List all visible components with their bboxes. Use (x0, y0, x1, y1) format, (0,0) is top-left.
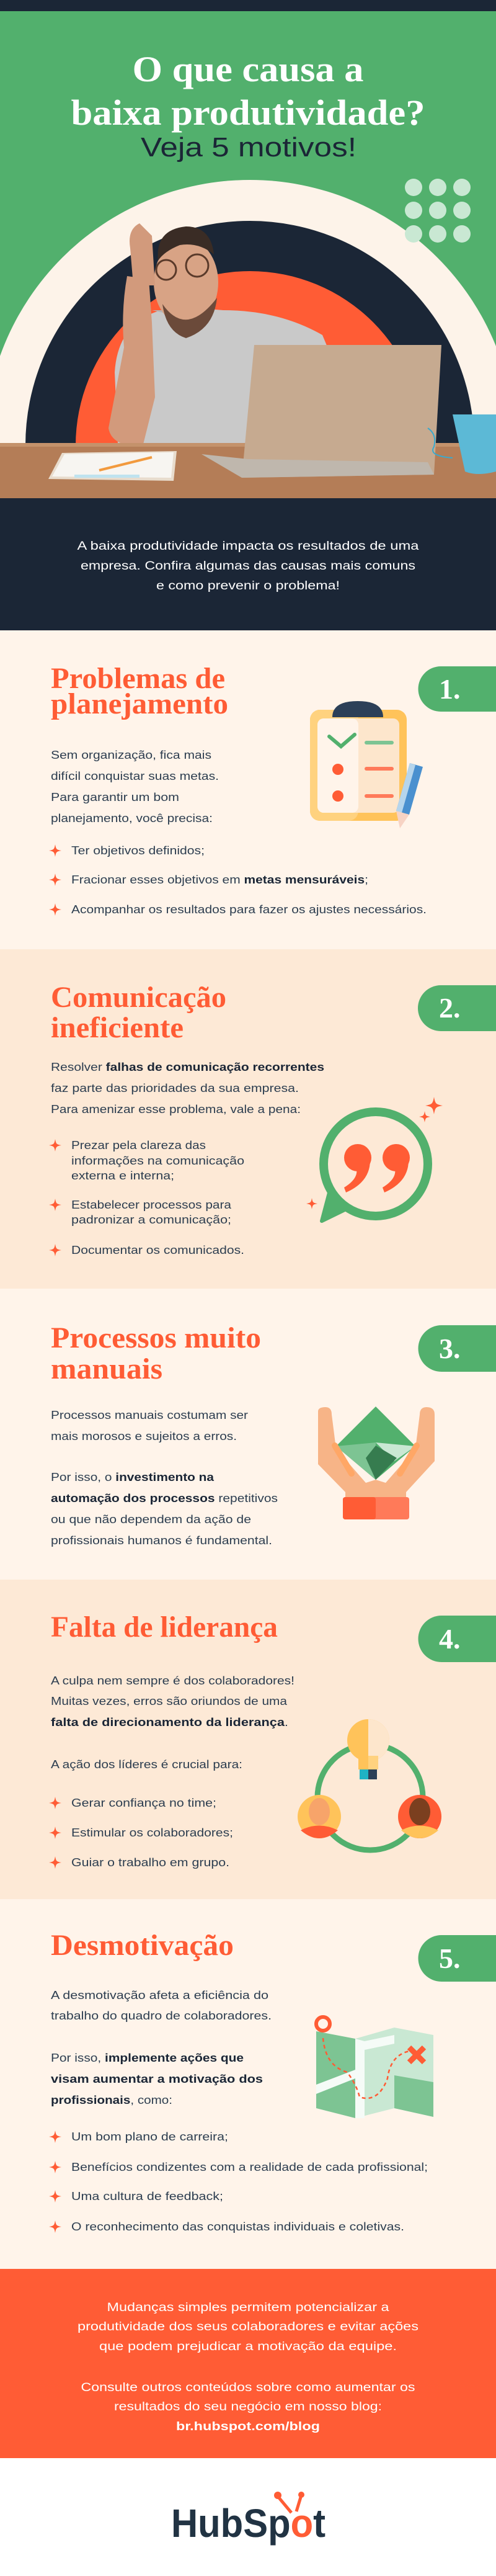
heading 2 (51, 981, 226, 1044)
bullet list 4: Gerar confiança no time; (71, 1797, 216, 1809)
badge 3: 3. (439, 1333, 460, 1364)
heading 2: Comunicação (51, 981, 226, 1014)
icon: leadership cycle (298, 1719, 441, 1850)
text block 5: trabalho do quadro de colaboradores. (51, 2010, 272, 2022)
text block 1: planejamento, você precisa: (51, 812, 213, 825)
callout: closing: br.hubspot.com/blog (176, 2420, 320, 2433)
intro panel: e como prevenir o problema! (156, 579, 340, 593)
bullet list 2: Estabelecer processos para (71, 1199, 232, 1211)
text block 5: Por isso, implemente ações que (51, 2052, 244, 2064)
bullet list 5 (49, 2131, 428, 2233)
text block 4: A culpa nem sempre é dos colaboradores! (51, 1675, 294, 1687)
heading 1 (51, 662, 228, 720)
badge 2 (418, 985, 496, 1031)
text block 4: A ação dos líderes é crucial para: (51, 1758, 242, 1771)
heading 5: Desmotivação (51, 1929, 234, 1962)
text block 5: profissionais , como: (51, 2094, 172, 2106)
notepad (48, 451, 177, 481)
callout: closing: produtividade dos seus colaboradores e evitar ações (78, 2320, 418, 2333)
heading 4: Falta de liderança (51, 1611, 278, 1644)
badge 3 (418, 1325, 496, 1372)
callout: closing: Consulte outros conteúdos sobre como aumentar os (81, 2381, 415, 2394)
text block 4: Muitas vezes, erros são oriundos de uma (51, 1695, 288, 1707)
heading 1: Problemas de (51, 662, 225, 695)
title: baixa produtividade? (71, 92, 425, 133)
desk (0, 443, 496, 498)
badge 1 (418, 666, 496, 712)
text block 2: Resolver falhas de comunicação recorrentes (51, 1061, 324, 1073)
text block 1: Sem organização, fica mais (51, 749, 211, 761)
top bar (0, 0, 496, 11)
bullet list 2: informações na comunicação (71, 1155, 244, 1167)
callout: closing: Mudanças simples permitem potencializar a (107, 2301, 389, 2314)
badge 4 (418, 1616, 496, 1662)
text block 5 (51, 1989, 272, 2106)
logo: HubSpot: HubSpot (171, 2501, 326, 2546)
decorative dots (405, 179, 471, 243)
text block 3: Processos manuais costumam ser (51, 1409, 248, 1421)
hero panel (0, 11, 496, 498)
text block 3: profissionais humanos é fundamental. (51, 1534, 272, 1547)
heading 1: planejamento (51, 687, 228, 720)
bullet list 2: Documentar os comunicados. (71, 1244, 244, 1256)
badge 2: 2. (439, 992, 460, 1024)
cup (428, 414, 496, 474)
bullet list 4: Guiar o trabalho em grupo. (71, 1856, 229, 1869)
text block 3: ou que não dependem da ação de (51, 1513, 251, 1526)
bullet list 4 (49, 1797, 233, 1869)
bullet list 1 (49, 844, 427, 916)
icon: clipboard (310, 701, 423, 828)
badge 5: 5. (439, 1943, 460, 1974)
intro panel: empresa. Confira algumas das causas mais comuns (81, 560, 415, 573)
text block 5: A desmotivação afeta a eficiência do (51, 1989, 268, 2001)
bullet list 5: Benefícios condizentes com a realidade de cada profissional; (71, 2161, 428, 2173)
heading 3: Processos muito (51, 1322, 261, 1354)
panel: 5 desmotivação (0, 1899, 496, 2269)
bullet list 5: O reconhecimento das conquistas individuais e coletivas. (71, 2220, 404, 2233)
photo: man at desk (108, 223, 338, 447)
bullet list 2: externa e interna; (71, 1169, 174, 1182)
callout: closing (0, 2269, 496, 2458)
bullet list 2: padronizar a comunicação; (71, 1214, 231, 1226)
badge 5 (418, 1935, 496, 1982)
intro panel (0, 498, 496, 630)
callout: closing: que podem prejudicar a motivação da equipe. (99, 2340, 397, 2353)
text block 4 (51, 1675, 294, 1771)
heading 3: manuais (51, 1353, 162, 1385)
bullet list 2: Prezar pela clareza das (71, 1139, 206, 1152)
text block 4: falta de direcionamento da liderança . (51, 1716, 288, 1729)
subtitle: Veja 5 motivos! (141, 132, 356, 163)
heading 2: ineficiente (51, 1011, 184, 1044)
text block 2 (51, 1061, 324, 1116)
bullet list 5: Um bom plano de carreira; (71, 2131, 228, 2143)
badge 4: 4. (439, 1623, 460, 1655)
title (71, 49, 425, 133)
text block 3 (51, 1409, 278, 1547)
bullet list 1: Fracionar esses objetivos em metas mensuráveis ; (71, 874, 368, 886)
text block 1: difícil conquistar suas metas. (51, 770, 219, 782)
bullet list 4: Estimular os colaboradores; (71, 1827, 233, 1839)
bullet list 2 (49, 1139, 244, 1256)
icon: hands with puzzle (318, 1407, 435, 1519)
laptop (202, 345, 441, 478)
text block 2: Para amenizar esse problema, vale a pena: (51, 1103, 301, 1116)
text block 1: Para garantir um bom (51, 791, 179, 803)
bullet list 5: Uma cultura de feedback; (71, 2190, 223, 2203)
footer (0, 2458, 496, 2576)
badge 1: 1. (439, 673, 460, 705)
text block 3: mais morosos e sujeitos a erros. (51, 1430, 237, 1442)
panel: 2 comunicação (0, 949, 496, 1289)
title: O que causa a (133, 49, 363, 89)
icon: map (316, 2017, 433, 2118)
text block 2: faz parte das prioridades da sua empresa. (51, 1082, 299, 1094)
heading 3 (51, 1322, 261, 1385)
panel: 4 liderança (0, 1580, 496, 1899)
intro panel: A baixa produtividade impacta os resultados de uma (77, 540, 419, 553)
bullet list 1: Ter objetivos definidos; (71, 844, 205, 857)
icon: speech bubble (306, 1097, 443, 1221)
panel: 1 planejamento (0, 630, 496, 949)
panel: 3 processos (0, 1289, 496, 1580)
callout: closing: resultados do seu negócio em nosso blog: (114, 2400, 382, 2413)
text block 1 (51, 749, 219, 825)
text block 3: automação dos processos repetitivos (51, 1492, 278, 1505)
text block 3: Por isso, o investimento na (51, 1471, 215, 1483)
text block 5: visam aumentar a motivação dos (51, 2073, 263, 2085)
bullet list 1: Acompanhar os resultados para fazer os ajustes necessários. (71, 903, 427, 916)
